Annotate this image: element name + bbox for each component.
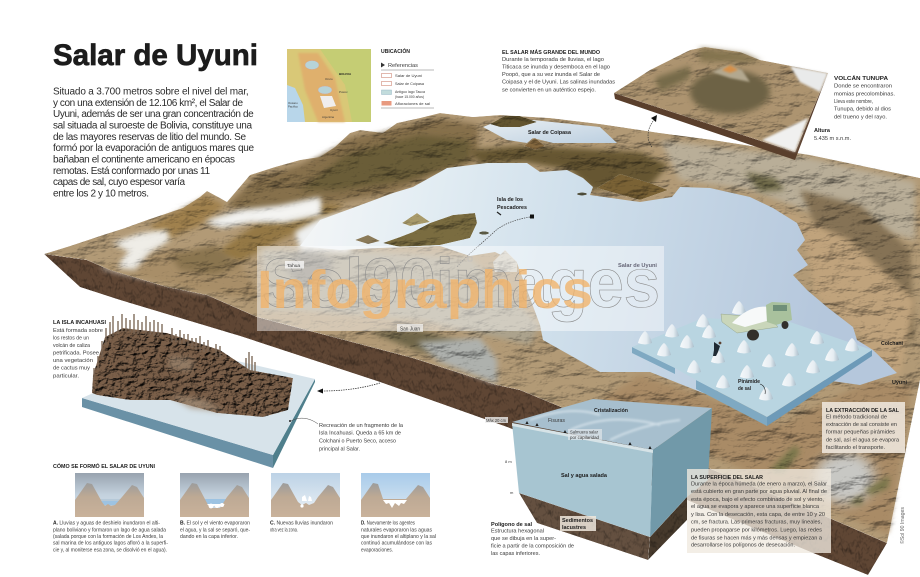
- text: el salar más grande: se convierten en un auténtico espejo.: [502, 87, 596, 93]
- intro text: entre los 2 y 10 metros.: [53, 188, 149, 200]
- intro text: capas de sal, cuyo espesor varía: [53, 177, 185, 188]
- intro text: Uyuni, además de ser una gran concentración de: [53, 109, 254, 120]
- caption D: que inundaron el altiplano y la sal: [361, 534, 436, 540]
- right face: [650, 408, 712, 537]
- Salar de Coipasa lake surface: [483, 120, 617, 143]
- labels: cross-section: Salmuera salar: [570, 430, 598, 434]
- caption A: plano boliviano y formaron un lago de agua salada: [53, 527, 166, 533]
- text: La Isla Incahuasi: los restos de un: [53, 335, 89, 341]
- caption C: [270, 520, 333, 533]
- label: pirámide de sal: de sal: [738, 386, 751, 392]
- map legend: Referencias: [388, 63, 418, 69]
- truck: [721, 302, 792, 340]
- label: Isla de los Pescadores: [497, 197, 527, 215]
- text: volcán Tunupa: VOLCÁN TUNUPA: [834, 75, 888, 82]
- intro text: y con una extensión de 12.106 km², el Salar de: [53, 98, 243, 109]
- panel: la superficie del salar: cm, se fractura. Las primeras fracturas, muy lineales,: [691, 520, 822, 526]
- caption C: C. Nuevas lluvias inundaron: [270, 520, 333, 526]
- panel: la superficie del salar: y lisa. Con la desecación, esta capa, de entre 10 y 20: [691, 512, 825, 518]
- labels: Colchani, Uyuni: Uyuni: [892, 380, 907, 386]
- terrain block: soil side: [44, 254, 887, 575]
- text: La Isla Incahuasi: de cactus muy: [53, 366, 90, 372]
- intro text: bañaban el continente americano en épocas: [53, 154, 235, 166]
- text: volcán Tunupa: 5.435 m s.n.m.: [814, 136, 851, 142]
- text: polígono de sal: las capas inferiores.: [491, 551, 540, 557]
- labels: Colchani, Uyuni: [881, 341, 907, 386]
- text: polígono de sal: Polígono de sal: [491, 522, 533, 528]
- panel: la superficie del salar: está cubierto en gran parte por agua pluvial. Al final de: [691, 489, 827, 495]
- watermark: orange text: Infographics: [257, 260, 593, 320]
- text: volcán Tunupa: momias precolombinas.: [834, 91, 895, 97]
- intro text: formó por la evaporación de antiguos mares que: [53, 143, 254, 154]
- caption A: A. Lluvias y aguas de deshielo inundaron el alti-: [53, 520, 160, 526]
- watermark: outlined text: Sol90images: [262, 244, 660, 322]
- caption B: B. El sol y el viento evaporaron: [180, 520, 250, 526]
- copyright: ©Sol 90 Images: [899, 506, 906, 544]
- panel: la extracción de la sal: [822, 402, 905, 453]
- text: el salar más grande: EL SALAR MÁS GRANDE DEL MUNDO: [502, 49, 600, 56]
- sediment layer: [519, 493, 650, 560]
- panel: la superficie del salar: esta época, bajo el efecto combinado de sol y viento,: [691, 497, 824, 503]
- location map: Potosí: [339, 90, 348, 94]
- panel: la superficie del salar: pueden propagarse por kilómetros. Luego, las redes: [691, 527, 822, 533]
- location map: Uyuni: [330, 108, 338, 112]
- intro text: remotas. Está conformado por unas 11: [53, 166, 210, 177]
- intro text: [53, 86, 254, 200]
- top face: [512, 399, 712, 450]
- labels: cross-section: Cristalización: [594, 408, 628, 414]
- text: el salar más grande: [502, 49, 615, 93]
- volcano block: Tunupa: [614, 47, 828, 160]
- panel: la superficie del salar: desarrollarse los polígonos de desecación.: [691, 542, 795, 548]
- arrow: Tunupa location: [648, 115, 657, 147]
- text: polígono de sal: ficie a partir de la composición de: [491, 544, 574, 550]
- text: La Isla Incahuasi: [53, 320, 107, 379]
- map legend: Afloraciones de sal: [395, 101, 430, 106]
- caption D: evaporaciones.: [361, 548, 393, 554]
- map legend: Salar de Uyuni: [395, 73, 422, 78]
- text: volcán Tunupa: Altura: [814, 128, 831, 134]
- panel: la extracción de la sal: extracción de sal consiste en: [826, 422, 897, 428]
- panel: la superficie del salar: de fisuras se hacen más y más densas y empiezan a: [691, 535, 822, 541]
- panel: la extracción de la sal: facilitando el transporte.: [826, 445, 885, 451]
- text: polígono de sal: [491, 522, 574, 557]
- salt flat whites on the west shore: [118, 198, 350, 266]
- labels: Colchani, Uyuni: Colchani: [881, 341, 903, 347]
- labels: cross-section: Máx 20 cm: [486, 418, 506, 423]
- watermark panel: [257, 246, 664, 331]
- text: La Isla Incahuasi: volcán de caliza: [53, 343, 90, 349]
- text: polígono de sal: Estructura hexagonal: [491, 529, 544, 535]
- map legend: Salar de Coipasa: [395, 81, 425, 86]
- arrow: Incahuasi location: [317, 383, 380, 394]
- label: Salar de Coipasa: Salar de Coipasa: [528, 130, 572, 136]
- text: el salar más grande: Poopó, que a su vez inunda el Salar de: [502, 72, 600, 78]
- label: Isla de los Pescadores: Pescadores: [497, 205, 527, 211]
- panel: la extracción de la sal: formar pequeñas pirámides: [826, 430, 895, 436]
- heading: cómo se formó: CÓMO SE FORMÓ EL SALAR DE UYUNI: [53, 462, 155, 470]
- text: el salar más grande: Titicaca se inunda y desemboca en el lago: [502, 64, 610, 70]
- left face: [512, 423, 653, 537]
- crust triangles: [525, 421, 652, 449]
- Isla Incahuasi block: [82, 314, 315, 468]
- location map: BOLIVIA: [339, 72, 352, 76]
- location map: Pacífico: [288, 104, 298, 108]
- location map: Océano: [288, 101, 298, 105]
- text: recreación: Recreación de un fragmento de la: [319, 423, 403, 429]
- caption D: D. Nuevamente los agentes: [361, 520, 415, 526]
- labels: towns and Salar de Uyuni: Tahua: [287, 263, 300, 269]
- labels: cross-section: Fisuras: [548, 418, 566, 424]
- text: volcán Tunupa: Donde se encontraron: [834, 84, 892, 90]
- diagram D: [361, 473, 430, 517]
- map legend: [381, 47, 434, 108]
- islands and peninsulas in the lake: [355, 116, 668, 272]
- labels: cross-section: Sedimentos: [562, 518, 593, 524]
- text: polígono de sal: que se dibuja en la super-: [491, 536, 556, 542]
- salt worker: [713, 342, 721, 356]
- caption A: [53, 520, 168, 554]
- label: Isla de los Pescadores: Isla de los: [497, 197, 523, 203]
- text: recreación: Colchani o Puerto Seco, acceso: [319, 438, 396, 444]
- map legend: Antiguo lago Tauca: [395, 89, 426, 94]
- text: volcán Tunupa: [814, 75, 895, 142]
- text: volcán Tunupa: Tunupa, debido al dios: [834, 107, 891, 113]
- panel: la extracción de la sal: LA EXTRACCIÓN DE LA SAL: [826, 406, 900, 414]
- caption D: [361, 520, 436, 554]
- labels: towns and Salar de Uyuni: [285, 261, 658, 332]
- text: La Isla Incahuasi: una vegetación: [53, 358, 93, 364]
- labels: towns and Salar de Uyuni: Salar de Uyuni: [618, 263, 658, 269]
- text: el salar más grande: Durante la temporada de lluvias, el lago: [502, 57, 604, 63]
- labels: cross-section: 8 m: [505, 459, 512, 464]
- caption A: cie y, al moniterse esa zona, se disolvió en el agua).: [53, 548, 167, 554]
- diagram C: [271, 473, 340, 517]
- labels: cross-section: Sal y agua salada: [561, 473, 608, 479]
- caption B: el agua, y la sal se separó, que-: [180, 527, 250, 533]
- cactus spikes: [94, 314, 255, 380]
- caption A: sal marina de los antiguos lagos afloró a la superfi-: [53, 541, 168, 547]
- text: La Isla Incahuasi: particular.: [53, 373, 79, 379]
- terrain block: land surface: [44, 113, 920, 543]
- caption C: otra vez la zona.: [270, 527, 298, 533]
- location map: [287, 49, 371, 122]
- map legend: (hace 15.000 años): [395, 94, 425, 99]
- panel: la superficie del salar: el agua se evapora y aparece una superficie blanca: [691, 504, 819, 510]
- labels: cross-section: [485, 408, 628, 531]
- diagram B: [180, 473, 249, 517]
- salt pyramids: [638, 301, 859, 400]
- text: recreación: principal al Salar.: [319, 446, 360, 452]
- location map: Oruro: [325, 77, 333, 81]
- panel: la superficie del salar: [687, 469, 831, 553]
- location map: Argentina: [322, 115, 334, 119]
- soil cross-section block: [512, 399, 712, 560]
- text: La Isla Incahuasi: LA ISLA INCAHUASI: [53, 320, 107, 326]
- labels: cross-section: lacustres: [562, 525, 586, 531]
- caption B: dando en la capa inferior.: [180, 534, 238, 540]
- caption D: continuó acumulándose con las: [361, 541, 432, 547]
- panel: la extracción de la sal: El método tradicional de: [826, 415, 887, 421]
- salt extraction platform: [632, 301, 872, 426]
- map legend: UBICACIÓN: [381, 47, 410, 55]
- labels: towns and Salar de Uyuni: San Juan: [400, 326, 420, 332]
- panel: la extracción de la sal: de sal, así el agua se evapora: [826, 437, 899, 443]
- labels: cross-section: m: [510, 490, 514, 495]
- title: Salar de Uyuni: [53, 39, 258, 72]
- text: volcán Tunupa: Lleva este nombre,: [834, 99, 873, 105]
- text: recreación: Isla Incahuasi. Queda a 65 km de: [319, 431, 401, 437]
- panel: la superficie del salar: LA SUPERFICIE DEL SALAR: [691, 475, 763, 481]
- arrow: Isla de los Pescadores: [457, 214, 534, 267]
- intro text: Situado a 3.700 metros sobre el nivel del mar,: [53, 86, 249, 98]
- text: recreación: [289, 418, 403, 452]
- Salar de Uyuni lake surface: [300, 163, 897, 393]
- labels: cross-section: por capilaridad: [570, 435, 599, 440]
- text: volcán Tunupa: del trueno y del rayo.: [834, 114, 887, 120]
- diagram A: [75, 473, 144, 517]
- intro text: sal situada al suroeste de Bolivia, constituye una: [53, 120, 252, 132]
- text: el salar más grande: Coipasa y el de Uyuni. Las salinas inundadas: [502, 80, 615, 86]
- panel: la superficie del salar: Durante la época húmeda (de enero a marzo), el Salar: [691, 481, 827, 487]
- intro text: de las mayores reservas de litio del mundo. Se: [53, 132, 246, 143]
- caption A: (salada porque con la formación de Los Andes, la: [53, 534, 163, 540]
- caption B: [180, 520, 250, 540]
- label: pirámide de sal: Pirámide: [738, 379, 760, 385]
- label: pirámide de sal: [738, 379, 765, 394]
- text: La Isla Incahuasi: petrificada. Posee: [53, 351, 99, 357]
- text: La Isla Incahuasi: Está formada sobre: [53, 328, 103, 334]
- caption D: naturales evaporaron las aguas: [361, 527, 432, 533]
